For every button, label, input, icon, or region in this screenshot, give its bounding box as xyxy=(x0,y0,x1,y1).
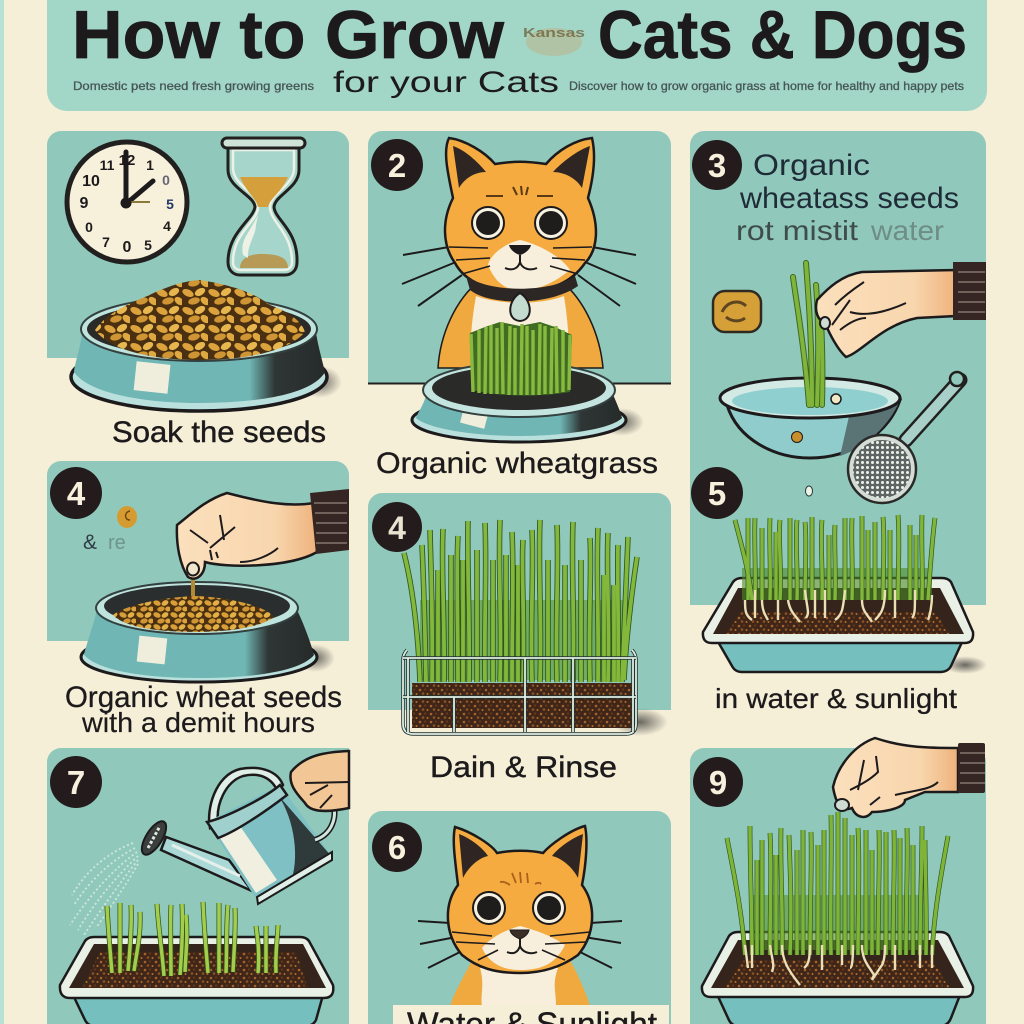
caption: in water and sunlight: in water & sunlight xyxy=(715,683,957,714)
panel: step 9 harvest xyxy=(690,738,986,1024)
panel: step 6 cat xyxy=(368,811,671,1024)
illustration: tray with sprouts xyxy=(60,902,333,1024)
icon: watering can xyxy=(137,768,334,904)
caption: soak the seeds: Soak the seeds xyxy=(112,416,326,449)
icon: seed and small text: re xyxy=(108,532,126,554)
badge: 9: 9 xyxy=(709,764,727,801)
panel: step 3 and 5 xyxy=(690,131,987,674)
caption band: water and sunlight xyxy=(393,1005,669,1024)
panel: step 5 tall grass in rack xyxy=(368,493,671,784)
illustration: tall grass tray xyxy=(702,812,973,1024)
subtitle small text left: Domestic pets need fresh growing greens xyxy=(73,79,314,93)
badge: 6 xyxy=(372,822,422,872)
heading: organic wheatgrass seeds: Organic xyxy=(753,149,870,182)
icon: seed and small text xyxy=(83,506,137,554)
panel: step 1 soak the seeds xyxy=(47,131,349,449)
icon: hand pinching xyxy=(816,262,986,357)
icon: clock: 12 xyxy=(119,152,135,169)
heading: organic wheatgrass seeds: rot mistit xyxy=(736,215,858,246)
illustration: bowl with grass xyxy=(412,322,644,442)
subtitle: for your Cats xyxy=(333,66,559,99)
icon: hand xyxy=(290,751,349,811)
icon: clock: 11 xyxy=(100,157,115,173)
subtitle small text right: Discover how to grow organic grass at home for healthy and happy pets xyxy=(569,79,964,93)
title blurred ornament xyxy=(523,25,585,56)
illustration: bowl of seeds xyxy=(81,582,335,682)
illustration: grass tray xyxy=(703,515,987,674)
badge: 4 second: 4 xyxy=(388,510,406,546)
badge: 2: 2 xyxy=(388,147,406,184)
badge: 4 second xyxy=(372,502,422,552)
badge: 9 xyxy=(693,757,743,807)
icon: clock: 1 xyxy=(146,157,154,173)
whiskers xyxy=(402,247,636,306)
icon: sprout blades xyxy=(793,263,822,405)
panel: step 4 add seeds xyxy=(47,461,349,738)
icon: bowl of seeds xyxy=(71,280,342,411)
icon: hand dropping seed xyxy=(177,489,349,596)
icon: seed packet xyxy=(713,291,761,332)
heading: organic wheatgrass seeds: wheatass seeds xyxy=(739,182,959,215)
badge: 5: 5 xyxy=(708,475,726,512)
badge: 7: 7 xyxy=(67,764,85,801)
badge: 3: 3 xyxy=(708,147,726,184)
icon: clock: 10 xyxy=(82,173,100,190)
badge: 2 xyxy=(371,139,423,191)
caption: drain and rinse: Dain & Rinse xyxy=(430,751,617,784)
icon: clock: 7 xyxy=(102,234,110,250)
icon: hand pulling grass xyxy=(833,738,985,817)
badge: 3 xyxy=(692,140,742,190)
icon: clock: 9 xyxy=(80,195,89,212)
icon: clock: 0 xyxy=(123,239,132,256)
panel: header xyxy=(47,0,987,111)
badge: 7 xyxy=(50,756,102,808)
icon: strainer xyxy=(848,372,964,503)
heading: organic wheatgrass seeds xyxy=(736,149,959,246)
icon: clock: 4 xyxy=(163,218,171,234)
icon: water drop xyxy=(806,486,812,496)
icon: water spray xyxy=(70,843,138,935)
icon: hourglass xyxy=(222,138,305,275)
panel: step 7 watering xyxy=(47,748,349,1024)
icon: clock: 0 xyxy=(85,219,93,235)
caption: organic wheat seeds: Organic wheat seeds xyxy=(65,681,342,714)
icon: clock xyxy=(67,142,187,262)
badge: 4 xyxy=(50,467,102,519)
caption: organic wheatgrass: Organic wheatgrass xyxy=(376,447,658,480)
illustration: tall grass rack xyxy=(403,520,668,736)
illustration: cat xyxy=(402,138,636,368)
badge: 5 xyxy=(691,467,743,519)
heading: organic wheatgrass seeds: water xyxy=(870,215,944,246)
icon: clock: 0 xyxy=(162,172,170,188)
icon: clock: 5 xyxy=(166,196,174,212)
icon: seed and small text: & xyxy=(83,531,97,554)
badge: 4: 4 xyxy=(67,475,86,512)
panel: step 2 cat with wheatgrass xyxy=(368,131,671,480)
illustration: cat xyxy=(418,826,622,1006)
caption: with a demit hours: with a demit hours xyxy=(81,707,315,738)
illustration: bowl of water with sprouts xyxy=(720,378,900,458)
icon: clock: 5 xyxy=(144,237,152,253)
title blurred ornament: Kansas xyxy=(523,25,585,40)
badge: 6: 6 xyxy=(388,829,406,866)
